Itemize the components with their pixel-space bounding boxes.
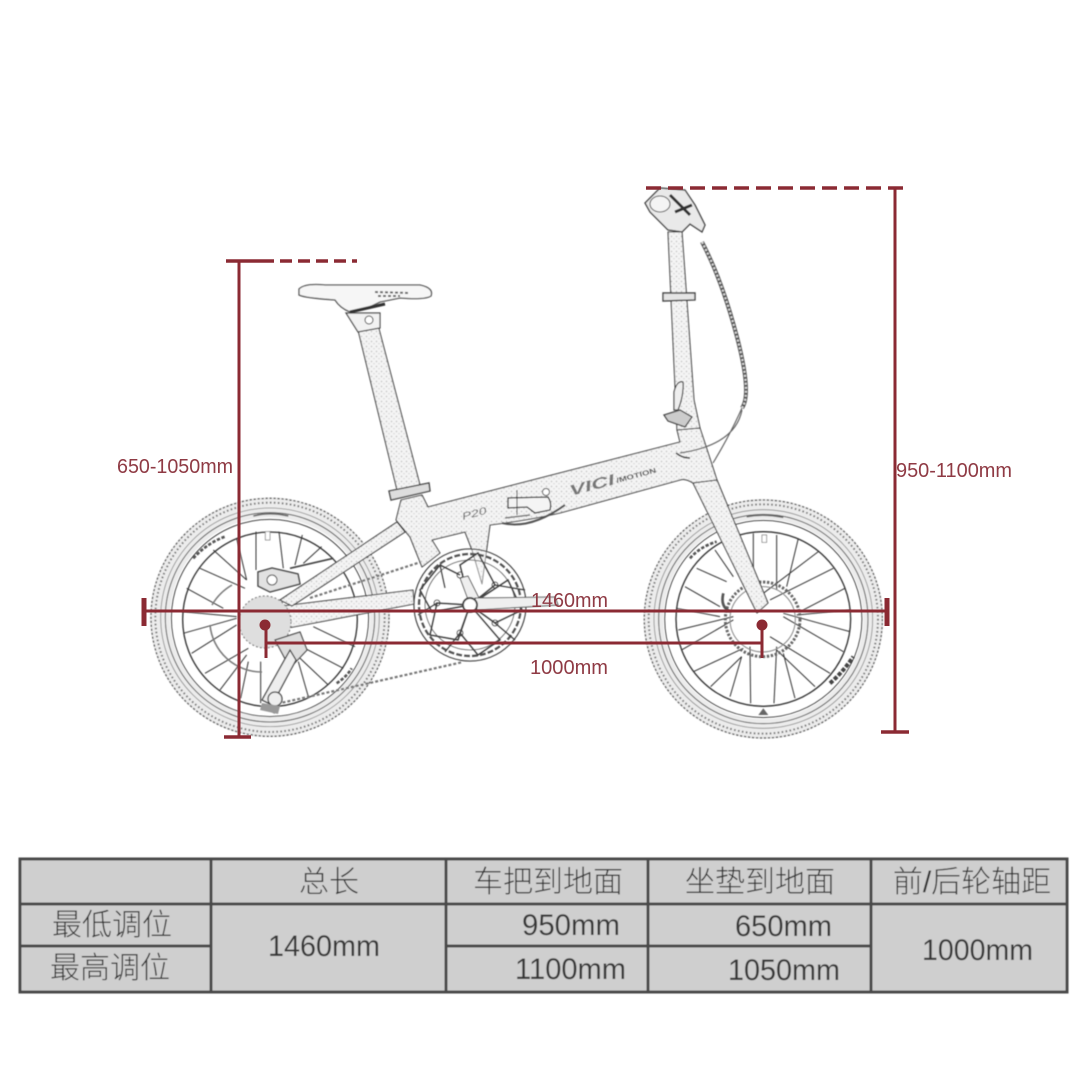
- table: specifications: [20, 859, 1067, 992]
- stem clamp: [663, 293, 695, 301]
- handle stem: [668, 232, 700, 430]
- frame logos and latch: [461, 453, 690, 525]
- table values: 1050mm: [728, 954, 840, 987]
- label: overall length: 1460mm: [531, 590, 608, 612]
- rear cassette and brake: [210, 568, 307, 714]
- table values: 1460mm: [268, 930, 380, 963]
- header cells: 总长: [299, 866, 359, 899]
- row labels: [50, 909, 172, 985]
- dimension: handlebar height line: [646, 188, 909, 732]
- dimension: wheelbase line: [260, 620, 767, 658]
- seatstay: [280, 522, 405, 606]
- table values: 1100mm: [515, 953, 626, 986]
- label: saddle height: 650-1050mm: [117, 456, 233, 478]
- front wheel: [644, 500, 882, 738]
- header cells: [299, 866, 1051, 899]
- frame logos and latch: VICI: [568, 471, 618, 500]
- table values: [268, 909, 1033, 987]
- fork: [693, 480, 768, 613]
- seat post: [358, 325, 420, 490]
- dimension: overall length line: [144, 598, 887, 626]
- frame logos and latch: P20: [461, 506, 489, 523]
- rear wheel: [151, 498, 389, 736]
- label: wheelbase: 1000mm: [530, 657, 608, 679]
- header cells: 坐垫到地面: [685, 866, 835, 899]
- frame: [396, 428, 717, 584]
- row labels: 最低调位: [52, 909, 172, 942]
- handlebar: [645, 188, 705, 232]
- saddle: [299, 284, 432, 332]
- chain: [263, 560, 463, 707]
- illustration: folding bicycle sketch: [151, 188, 882, 738]
- table values: 950mm: [522, 909, 620, 942]
- frame logos and latch: /MOTION: [616, 468, 657, 485]
- table values: 1000mm: [922, 934, 1033, 967]
- seat clamp: [389, 483, 430, 500]
- dimension: saddle height line: [224, 261, 357, 737]
- row labels: 最高调位: [50, 952, 170, 985]
- header cells: 前/后轮轴距: [893, 866, 1051, 899]
- folding lever: [664, 382, 692, 427]
- brake cable: [680, 242, 746, 463]
- label: handlebar height: 950-1100mm: [896, 460, 1012, 482]
- chainring: [414, 549, 558, 661]
- table values: 650mm: [735, 910, 832, 943]
- header cells: 车把到地面: [473, 866, 623, 899]
- chainstay: [283, 590, 414, 628]
